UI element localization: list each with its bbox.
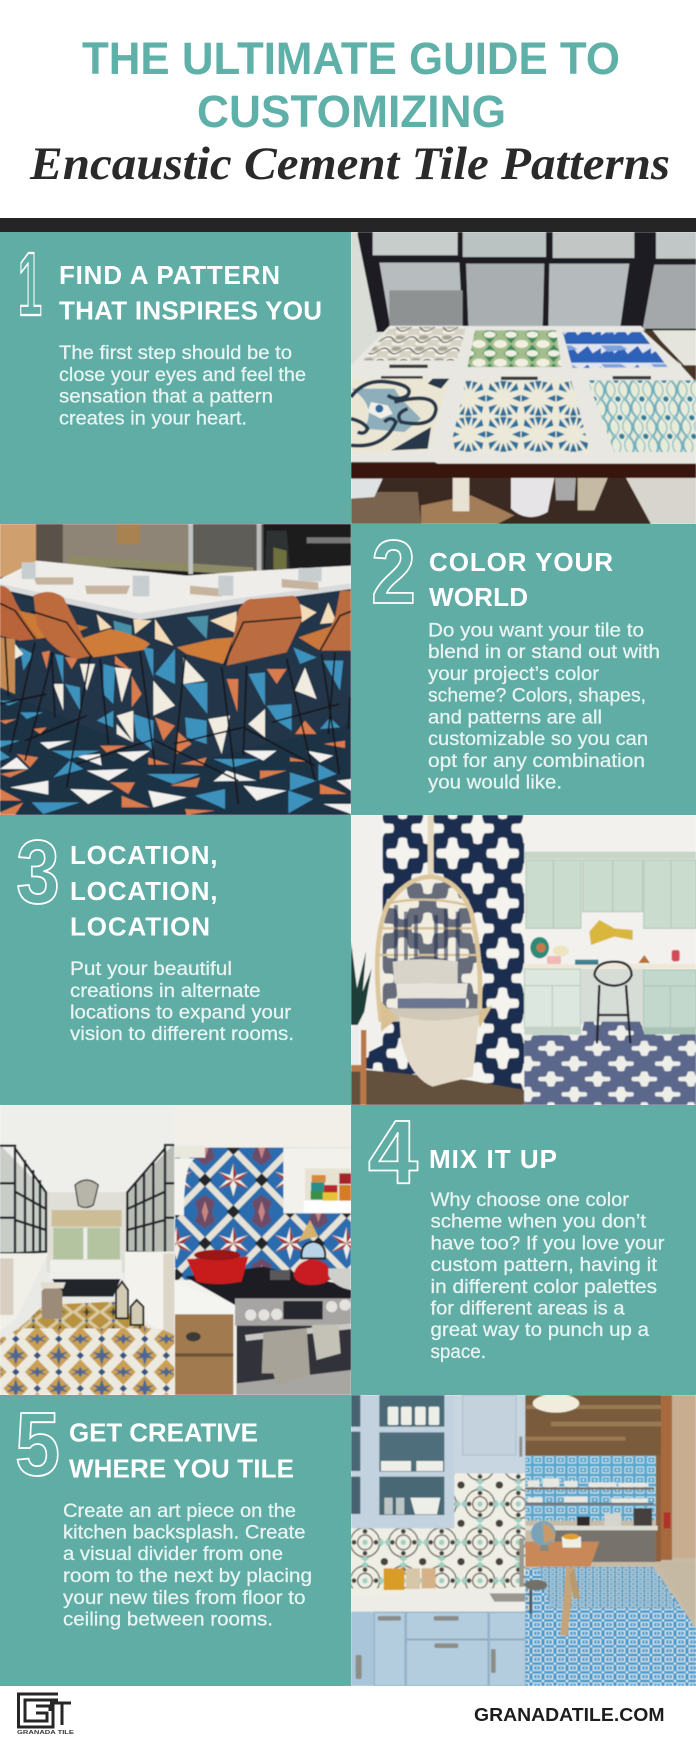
body text 3: vision to different rooms. [70,1024,294,1045]
body text 3: locations to expand your [70,1003,292,1024]
open shelves [525,1478,654,1505]
numeral 3: 3 [16,822,60,922]
body text 2: opt for any combination [428,751,645,772]
body text 4: Why choose one color [430,1190,630,1211]
white counter [0,561,351,620]
body text 2: customizable so you can [428,729,648,750]
numeral 2: 2 [371,522,416,623]
heading line 1: THE ULTIMATE GUIDE TO [82,33,620,84]
six tile samples [351,327,696,452]
pendant lamp [533,1394,579,1413]
red pot [187,1250,248,1284]
counter and cabinet [175,1282,235,1319]
body text 2 [428,621,660,794]
wooden table and globe [525,1521,599,1636]
body text 5: room to the next by placing [63,1566,312,1587]
shelf [283,1148,351,1213]
body text 2: Do you want your tile to [428,621,644,642]
body text 4: have too? If you love your [430,1233,665,1254]
panel 4: mix it up [351,1103,696,1395]
body text 5: Create an art piece on the [63,1501,296,1522]
heading 5: WHERE YOU TILE [69,1453,294,1483]
body text 4: great way to punch up a [430,1320,649,1341]
lower cabinets [351,1612,525,1686]
body text 1 [59,343,306,430]
body text 3 [70,959,294,1045]
body text 2: blend in or stand out with [428,642,660,663]
bathroom [0,1105,174,1395]
body text 5: your new tiles from floor to [63,1588,306,1609]
numeral 4: 4 [368,1103,418,1203]
body text 5: ceiling between rooms. [63,1610,273,1630]
photo: bar stools with triangle tile [0,524,351,815]
kitchen with blue tiles [174,1105,351,1395]
heading 2: WORLD [429,582,528,612]
body text 4 [430,1190,665,1363]
photo: bathroom and blue tile kitchen [0,1105,351,1395]
website: GRANADATILE.COM [474,1704,664,1725]
numeral 5: 5 [15,1394,60,1495]
heading 3 [70,840,218,942]
patterned floor [10,1302,157,1335]
script subtitle: Encaustic Cement Tile Patterns [29,138,670,190]
body text 5 [63,1501,312,1630]
white slabs [351,326,696,464]
logo: Granada Tile: GRANADA TILE [17,1730,74,1736]
stored rolls and boxes [351,478,696,524]
body text 2: scheme? Colors, shapes, [428,686,646,707]
logo: Granada Tile [17,1694,74,1736]
red kettle [293,1220,333,1285]
heading 4: MIX IT UP [429,1144,557,1174]
black stool [594,962,632,1043]
left wall with cross tile [351,815,524,1105]
hanging rattan chair [376,815,493,1087]
heading 2 [429,547,613,612]
heading 3: LOCATION, [70,876,218,906]
body text 4: in different color palettes [430,1277,657,1298]
gas range [185,1267,351,1305]
clawfoot tub [40,1273,123,1319]
dish towels [262,1328,310,1386]
body text 1: The first step should be to [59,343,292,364]
white countertop [351,1587,525,1622]
body text 4: space. [430,1342,486,1363]
body text 2: your project’s color [428,664,600,685]
footer [17,1694,664,1736]
panel 1: find a pattern [0,232,351,524]
numeral 1: 1 [18,233,42,334]
back counter [525,1508,670,1562]
stool legs [0,636,350,804]
heading 3: LOCATION [70,912,210,942]
lanterns [116,1282,143,1325]
body text 2: you would like. [428,772,562,794]
pendant light [75,1180,98,1208]
kitchen floor [524,1022,696,1105]
panel 2: color your world [351,522,696,815]
title [29,33,670,190]
floor triangles [0,692,351,815]
range hood [175,1105,351,1148]
wall and frosted windows [351,232,696,365]
wood table edge [351,464,696,478]
heading 5: GET CREATIVE [69,1418,258,1448]
heading 1: THAT INSPIRES YOU [59,296,322,326]
heading 2: COLOR YOUR [429,547,613,577]
dark divider band [0,218,696,232]
heading 3: LOCATION, [70,840,218,870]
body text 3: Put your beautiful [70,959,232,980]
mint kitchen [524,815,696,1105]
back of restaurant [0,524,351,577]
plant and stool [351,942,372,1105]
kitchen with pale blue cabinets [351,1395,525,1686]
orange stools [0,586,351,666]
panel 3: location [0,815,351,1105]
body text 2: and patterns are all [428,707,602,728]
photo: hanging chair and mint kitchen [351,815,696,1105]
body text 5: a visual divider from one [63,1544,283,1565]
photo: tile samples on table [351,232,696,524]
body text 1: sensation that a pattern [59,387,273,408]
body text 1: close your eyes and feel the [59,365,306,386]
body text 5: kitchen backsplash. Create [63,1523,306,1544]
cafe with blue tile [525,1394,696,1686]
heading 1: FIND A PATTERN [59,260,280,290]
body text 1: creates in your heart. [59,408,247,430]
panel 5: get creative [0,1394,351,1686]
body text 4: custom pattern, having it [430,1255,658,1276]
body text 4: scheme when you don’t [430,1212,647,1233]
blue patterned floor [525,1568,696,1686]
photo: backsplash kitchen and blue tile cafe [351,1395,696,1686]
wall tiles [0,589,351,766]
heading 5 [69,1418,294,1483]
body text 3: creations in alternate [70,981,261,1002]
heading line 2: CUSTOMIZING [197,86,506,137]
heading 1 [59,260,322,326]
body text 4: for different areas is a [430,1299,625,1320]
